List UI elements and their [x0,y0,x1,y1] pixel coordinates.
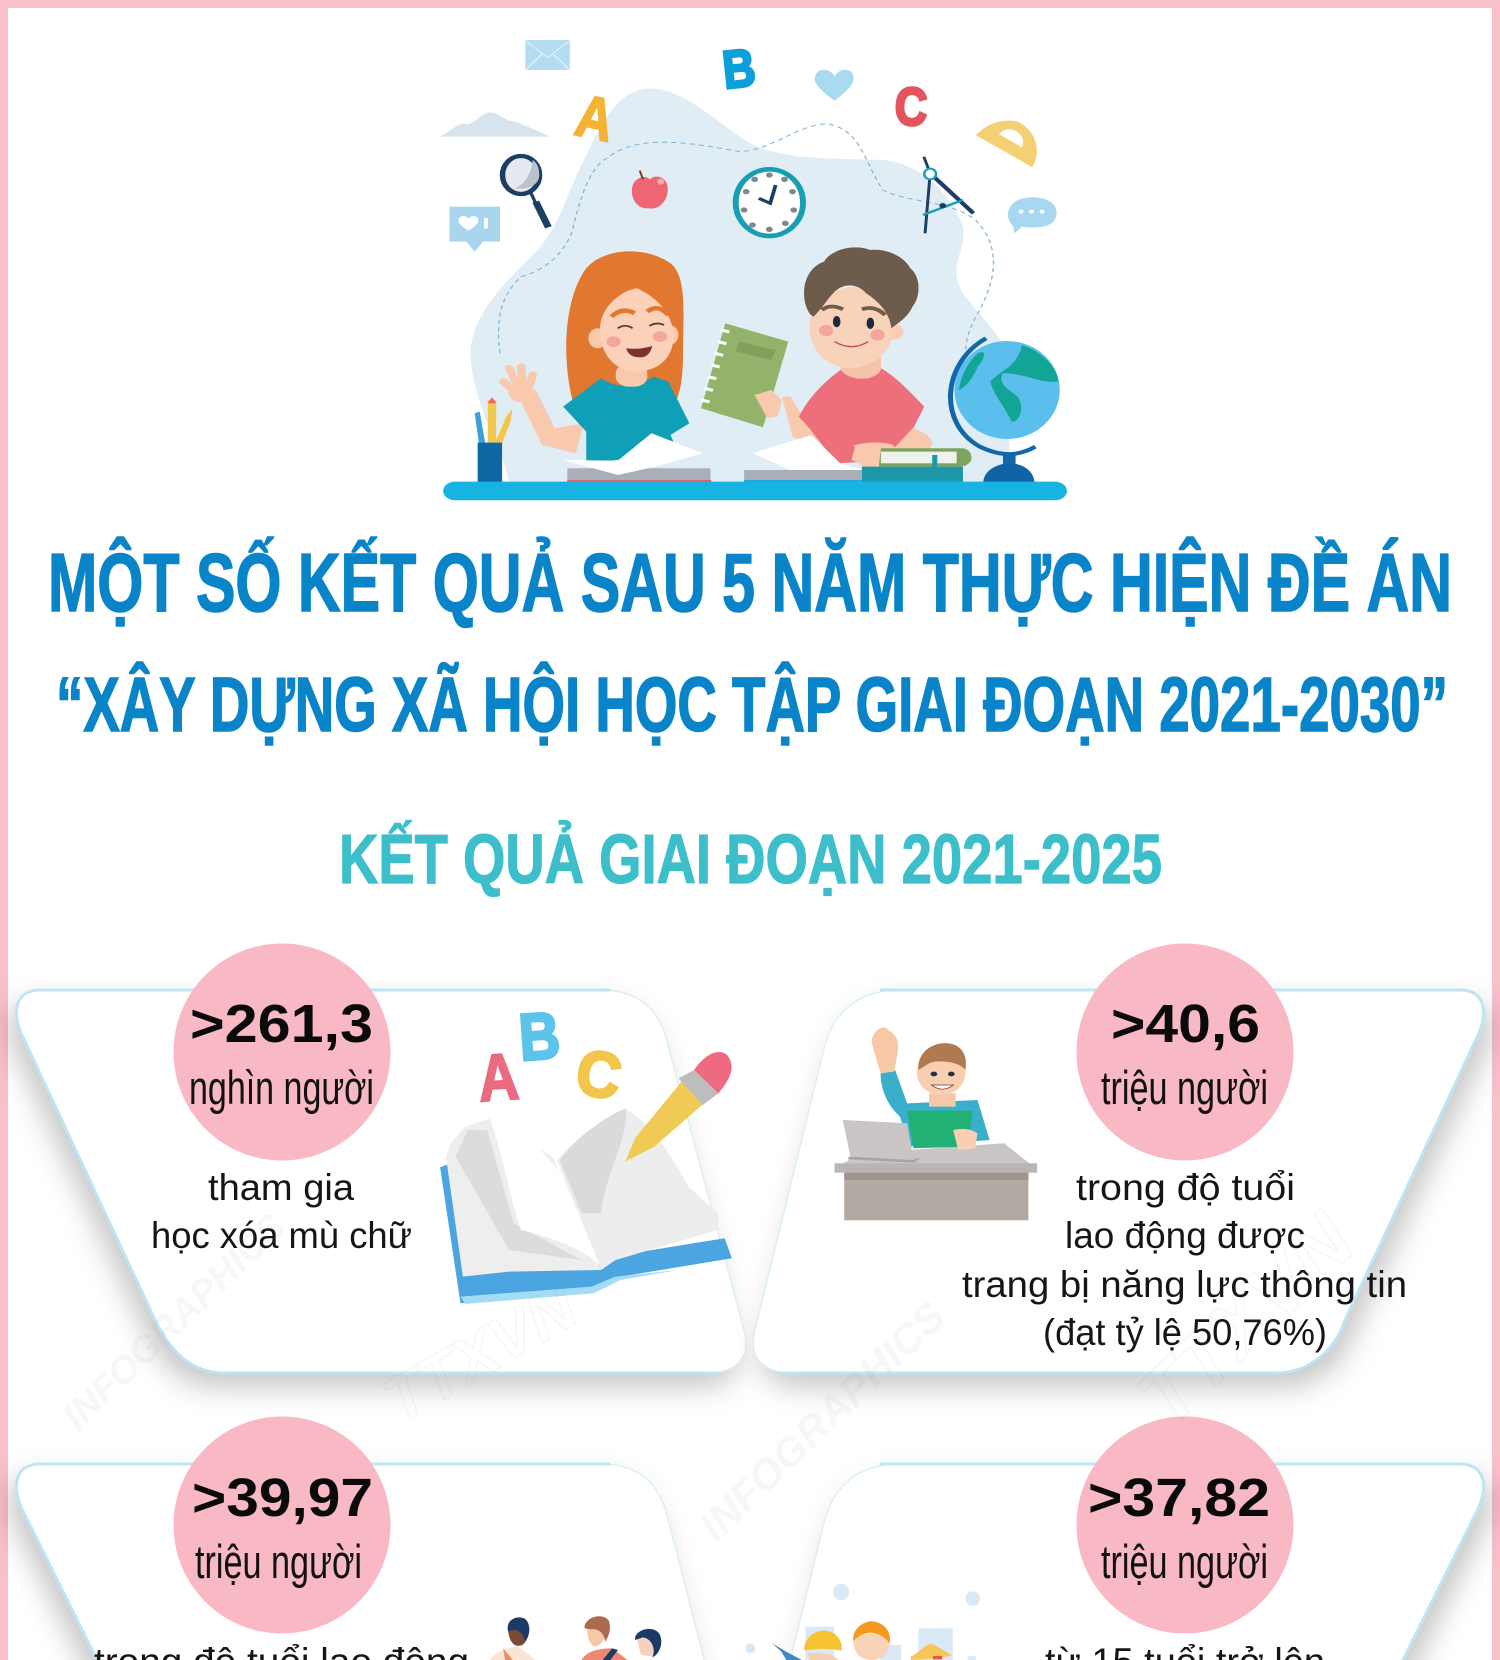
icon: workers [745,1584,980,1660]
watermark agency left: TTXVN [371,1269,590,1437]
title: main heading [48,535,1452,898]
panel card shape [16,1464,712,1660]
panel: aged 15 and over [745,1416,1484,1660]
description: lao động được [1065,1215,1305,1256]
stat unit: triệu người [1101,1535,1268,1588]
girl [503,251,689,463]
header illustration: students studying [439,40,1067,500]
icon: heart [815,70,854,101]
icon: young people [490,1616,661,1660]
table top [443,482,1067,500]
icon: magnifying glass [502,156,548,227]
watermark text left: INFOGRAPHICS [55,1206,294,1438]
letter block A: A [476,1039,521,1115]
pencil cup [475,397,513,483]
section heading: KẾT QUẢ GIAI ĐOẠN 2021-2025 [339,820,1162,898]
pink stat circle [1076,944,1294,1160]
letter block B: B [517,998,562,1074]
letter B: B [720,38,758,100]
icon: apple [632,171,668,208]
panel: literacy [16,944,746,1373]
panel: working age [16,1416,712,1660]
panel: information literacy [753,944,1484,1373]
panel card shape [16,990,746,1373]
icon: student at desk [835,1027,1037,1220]
icon: clock [736,169,803,236]
description: trang bị năng lực thông tin [962,1264,1407,1305]
pink stat circle [1076,1416,1294,1634]
outer edge highlight [16,990,720,1373]
hand on book [851,442,894,473]
stat unit: triệu người [1101,1061,1268,1114]
panel card shape [753,990,1484,1373]
watermark text middle: INFOGRAPHICS [690,1292,954,1549]
green notebook [701,323,788,427]
stat unit: triệu người [195,1535,362,1588]
stat value: >40,6 [1111,994,1260,1054]
outer edge highlight [880,1464,1484,1660]
watermark agency right: TTXVN [1120,1195,1372,1442]
description: tham gia [208,1167,354,1208]
illustration background blob [470,88,1009,482]
letter block C: C [571,1036,627,1114]
description [151,1167,412,1256]
boy [782,247,932,463]
icon: like bubble [449,207,500,252]
globe [950,338,1060,483]
pink stat circle [174,1416,390,1634]
letter C: C [894,77,928,137]
pink stat circle [174,944,390,1160]
stat value: >261,3 [190,994,373,1054]
description: (đạt tỷ lệ 50,76%) [1043,1312,1327,1353]
stat value: >39,97 [192,1468,373,1528]
icon: cloud [439,112,550,137]
icon: open book with ABC [440,1052,732,1304]
stat unit: nghìn người [189,1061,374,1114]
icon: protractor [976,121,1037,167]
icon: compass [923,157,973,233]
open book right [744,435,866,483]
description: học xóa mù chữ [151,1215,412,1256]
stat value: >37,82 [1088,1468,1270,1528]
panel card shape [783,1464,1484,1660]
description [962,1167,1407,1353]
letter A: A [570,81,620,155]
stacked books [862,448,971,483]
outer edge highlight [16,1464,610,1660]
dashed flight path [499,124,993,360]
outer edge highlight [780,990,1484,1373]
watermark [55,1195,1372,1549]
open book left [563,433,711,483]
icon: envelope [525,40,570,70]
icon: chat bubble [1008,197,1057,233]
description: trong độ tuổi [1076,1167,1295,1208]
